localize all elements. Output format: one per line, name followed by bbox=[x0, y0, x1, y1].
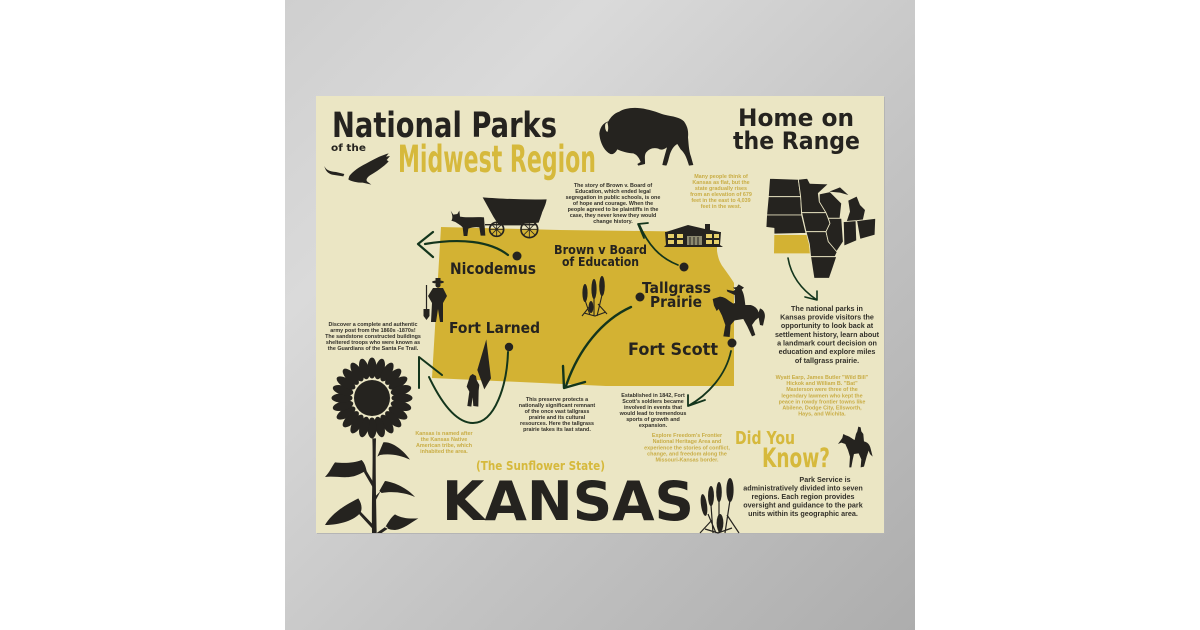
text: brown v board: segregation in public schools, is one bbox=[566, 195, 660, 201]
text: fort larned: army post from the 1860s -1870s! bbox=[330, 328, 416, 334]
arrow: fort larned bbox=[419, 343, 513, 423]
page background wall bbox=[285, 0, 915, 630]
heading: home on the range: Home on bbox=[738, 104, 854, 132]
label: brown v board of education: Brown v Board bbox=[554, 242, 647, 257]
text: national parks intro bbox=[775, 304, 880, 365]
icon: horse and rider bbox=[838, 427, 873, 467]
text: fort scott: expansion. bbox=[639, 423, 668, 429]
text: elevation: state gradually rises bbox=[695, 186, 747, 192]
title: National Parks bbox=[332, 106, 557, 146]
text: fort larned: the Guardians of the Santa Fe Trail. bbox=[328, 346, 419, 352]
label: tallgrass prairie: Tallgrass bbox=[642, 279, 711, 297]
text: kansas name origin: inhabited the area. bbox=[420, 449, 468, 455]
arrow: tallgrass prairie bbox=[563, 292, 644, 388]
text: did you know fact: units within its geographic area. bbox=[748, 509, 858, 518]
text: fort larned: Discover a complete and authentic bbox=[329, 322, 417, 328]
text: brown v board: people agreed to be plaintiffs in the bbox=[568, 207, 658, 213]
text: lawmen: Hays, and Wichita. bbox=[798, 412, 846, 418]
text: fort scott: sports of growth and bbox=[626, 417, 680, 423]
text: freedom's frontier: Missouri-Kansas border. bbox=[656, 458, 719, 464]
poster panel bbox=[316, 96, 884, 533]
text: elevation: from an elevation of 679 bbox=[690, 192, 752, 198]
text: national parks intro: Kansas provide visitors the bbox=[780, 312, 874, 322]
text: brown v board: case, they never knew they would bbox=[570, 213, 656, 219]
text: fort larned: sheltered troops who were known as bbox=[326, 340, 420, 346]
text: fort scott: would lead to tremendous bbox=[619, 411, 686, 417]
heading: did you know: Know? bbox=[762, 443, 830, 474]
icon: soldier with flag bbox=[467, 339, 491, 407]
icon: brown v board school building bbox=[664, 224, 723, 247]
text: kansas name origin: American tribe, which bbox=[416, 443, 472, 449]
arrow: brown v board bbox=[638, 223, 688, 272]
label: brown v board of education bbox=[554, 242, 647, 269]
text: national parks intro: opportunity to look back at bbox=[781, 321, 874, 330]
text: fort scott: Established in 1842, Fort bbox=[621, 393, 685, 399]
icon: prairie grass in kansas bbox=[582, 276, 607, 316]
text: lawmen: Wyatt Earp, James Butler "Wild Bill" bbox=[776, 375, 869, 381]
text: tallgrass preserve: resources. Here the tallgrass bbox=[520, 421, 594, 427]
text: freedom's frontier: change, and freedom along the bbox=[647, 452, 727, 458]
text: freedom's frontier bbox=[644, 433, 730, 464]
icon: ox and covered wagon bbox=[451, 197, 547, 238]
icon: sunflower bbox=[325, 358, 418, 533]
text: elevation: Kansas as flat, but the bbox=[692, 180, 750, 186]
text: did you know fact: administratively divided into seven bbox=[743, 484, 863, 492]
text: national parks intro: of tallgrass prairie. bbox=[795, 356, 859, 365]
text: did you know fact: regions. Each region provides bbox=[751, 492, 855, 501]
title bbox=[331, 106, 596, 181]
text: national parks intro: education and explore miles bbox=[779, 347, 875, 356]
arrow: locator map to text bbox=[788, 258, 817, 300]
icon: settler with shovel bbox=[424, 278, 447, 322]
kansas state map bbox=[432, 227, 734, 386]
label: nicodemus: Nicodemus bbox=[450, 259, 536, 278]
text: tallgrass preserve: prairie and its cultural bbox=[529, 415, 586, 421]
title: Midwest Region bbox=[398, 138, 596, 181]
text: lawmen: Hickok and William B. "Bat" bbox=[786, 381, 858, 387]
text: tallgrass preserve: of the once vast tallgrass bbox=[525, 409, 589, 415]
heading: home on the range: the Range bbox=[733, 127, 860, 155]
heading: kansas: KANSAS bbox=[442, 470, 694, 533]
text: kansas name origin bbox=[415, 431, 474, 455]
text: kansas name origin: the Kansas Native bbox=[421, 437, 467, 443]
icon: eagle bbox=[324, 153, 390, 185]
text: fort scott bbox=[619, 393, 686, 429]
text: fort larned: The sandstone constructed buildings bbox=[325, 334, 421, 340]
heading: home on the range bbox=[733, 104, 860, 155]
text: tallgrass preserve: This preserve protects a bbox=[526, 397, 589, 403]
arrow: nicodemus bbox=[418, 232, 522, 260]
label: tallgrass prairie: Prairie bbox=[650, 293, 702, 311]
arrow: fort scott bbox=[688, 338, 736, 406]
text: tallgrass preserve: nationally significant remnant bbox=[519, 403, 595, 409]
text: tallgrass preserve: prairie takes its last stand. bbox=[523, 427, 591, 433]
title: of the bbox=[331, 143, 366, 154]
text: brown v board: Education, which ended legal bbox=[575, 189, 651, 195]
text: elevation: feet in the west. bbox=[701, 204, 742, 210]
poster shadow bbox=[317, 97, 885, 534]
text: elevation: feet in the east to 4,039 bbox=[691, 198, 751, 204]
text: tallgrass preserve bbox=[519, 397, 595, 433]
text: fort larned bbox=[325, 322, 421, 352]
text: lawmen: legendary lawmen who kept the bbox=[781, 394, 863, 400]
midwest locator map bbox=[766, 178, 876, 278]
text: brown v board: of hope and courage. When the bbox=[573, 201, 653, 207]
text: lawmen: Masterson were three of the bbox=[786, 387, 858, 393]
text: did you know fact: Park Service is bbox=[799, 475, 851, 484]
text: brown v board: change history. bbox=[593, 219, 633, 225]
text: fort scott: involved in events that bbox=[624, 405, 682, 411]
text: elevation: Many people think of bbox=[694, 174, 748, 180]
subtitle: the sunflower state: (The Sunflower State) bbox=[476, 459, 605, 473]
label: fort larned: Fort Larned bbox=[449, 319, 540, 337]
text: brown v board bbox=[566, 183, 660, 225]
text: did you know fact: oversight and guidance to the park bbox=[743, 500, 863, 510]
text: kansas name origin: Kansas is named after bbox=[415, 431, 474, 437]
text: fort scott: Scott's soldiers became bbox=[622, 399, 684, 405]
label: tallgrass prairie bbox=[642, 279, 711, 311]
icon: bison bbox=[599, 108, 693, 166]
heading: did you know bbox=[735, 428, 830, 474]
text: national parks intro: settlement history, learn about bbox=[775, 330, 880, 339]
icon: wheat grass bbox=[699, 478, 739, 533]
heading: did you know: Did You bbox=[735, 428, 795, 449]
text: lawmen: Abilene, Dodge City, Ellsworth, bbox=[782, 406, 862, 412]
text: elevation bbox=[690, 174, 752, 210]
text: lawmen bbox=[776, 375, 869, 418]
label: brown v board of education: of Education bbox=[562, 254, 639, 269]
text: freedom's frontier: Explore Freedom's Frontier bbox=[652, 433, 723, 439]
label: fort scott: Fort Scott bbox=[628, 340, 718, 360]
icon: rider on horse bbox=[713, 284, 765, 337]
text: brown v board: The story of Brown v. Board of bbox=[574, 183, 652, 189]
text: did you know fact bbox=[743, 475, 863, 518]
text: lawmen: peace in rowdy frontier towns like bbox=[779, 400, 865, 406]
text: national parks intro: a landmark court decision on bbox=[777, 338, 877, 348]
text: freedom's frontier: experience the stories of conflict, bbox=[644, 446, 730, 452]
text: national parks intro: The national parks in bbox=[791, 304, 863, 313]
text: freedom's frontier: National Heritage Area and bbox=[653, 439, 721, 445]
